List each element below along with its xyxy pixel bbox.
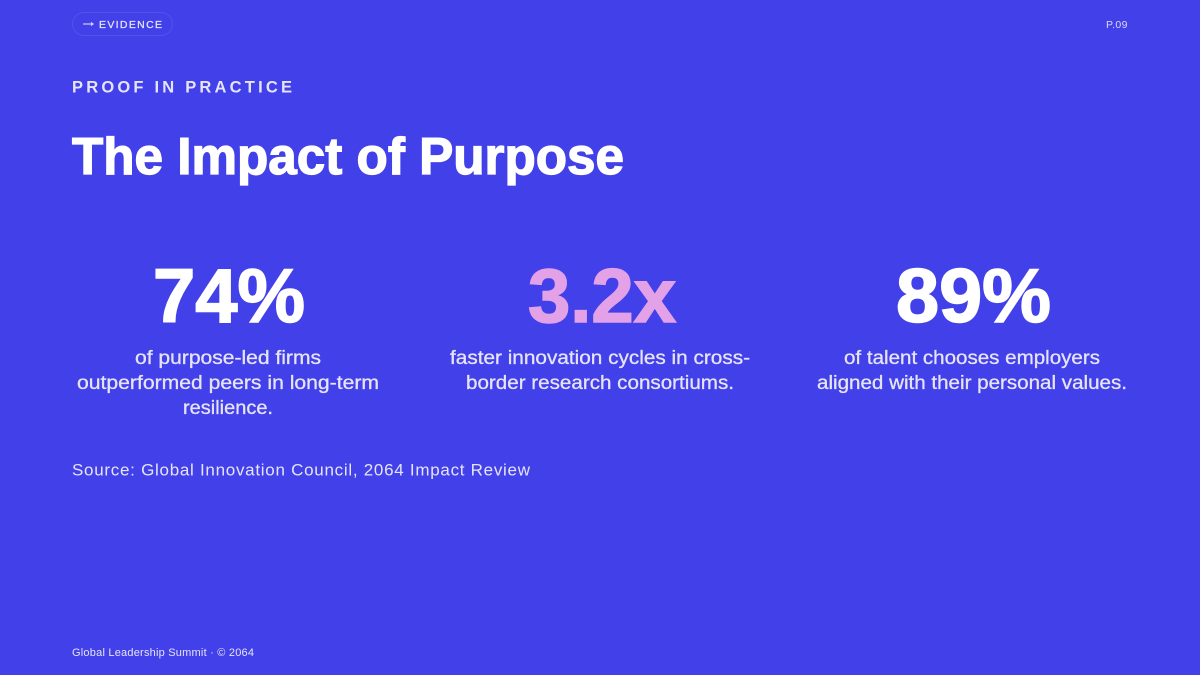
tag text: EVIDENCE — [99, 19, 162, 31]
tag pill: evidence — [72, 12, 172, 36]
eyebrow: PROOF IN PRACTICE — [72, 78, 292, 96]
stat description: aligned with their personal values. — [817, 373, 1127, 394]
stat description — [77, 348, 379, 419]
icon: arrow — [83, 22, 93, 26]
stat description: outperformed peers in long-term — [77, 373, 379, 394]
stat number: 89% — [896, 254, 1051, 339]
stat description: resilience. — [183, 398, 273, 419]
stat number: 3.2x — [528, 254, 676, 339]
stat column: 74% — [77, 254, 379, 419]
source line: Source: Global Innovation Council, 2064 Impact Review — [72, 460, 531, 480]
page number: P.09 — [1106, 19, 1128, 31]
stat description — [817, 348, 1127, 394]
stat number: 74% — [153, 254, 305, 339]
stat description: border research consortiums. — [466, 373, 734, 394]
stat column: 3.2x — [450, 254, 750, 394]
footer: Global Leadership Summit · © 2064 — [72, 647, 254, 659]
stat description — [450, 348, 750, 394]
stat description: of talent chooses employers — [844, 348, 1100, 369]
title: The Impact of Purpose — [72, 128, 624, 186]
stat description: faster innovation cycles in cross- — [450, 348, 750, 369]
stat column: 89% — [817, 254, 1127, 394]
stat description: of purpose-led firms — [135, 348, 321, 369]
